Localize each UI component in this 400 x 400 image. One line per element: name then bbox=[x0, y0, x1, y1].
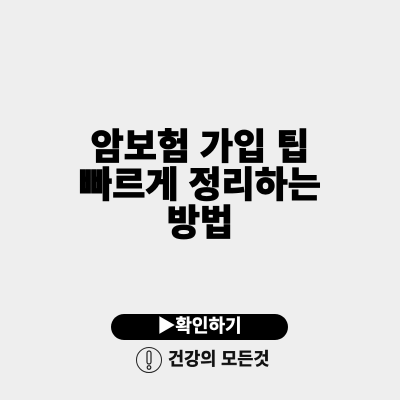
title: 암보험 가입 팁 bbox=[91, 126, 309, 167]
title bbox=[79, 126, 321, 243]
button: confirm bbox=[111, 314, 288, 340]
title: 방법 bbox=[167, 202, 233, 243]
brand: icon and name bbox=[136, 347, 269, 373]
title: 빠르게 정리하는 bbox=[79, 164, 321, 205]
icon: exclamation circle bbox=[136, 347, 162, 373]
button: confirm: ▶확인하기 bbox=[157, 316, 242, 336]
brand name: 건강의 모든것 bbox=[168, 349, 269, 369]
